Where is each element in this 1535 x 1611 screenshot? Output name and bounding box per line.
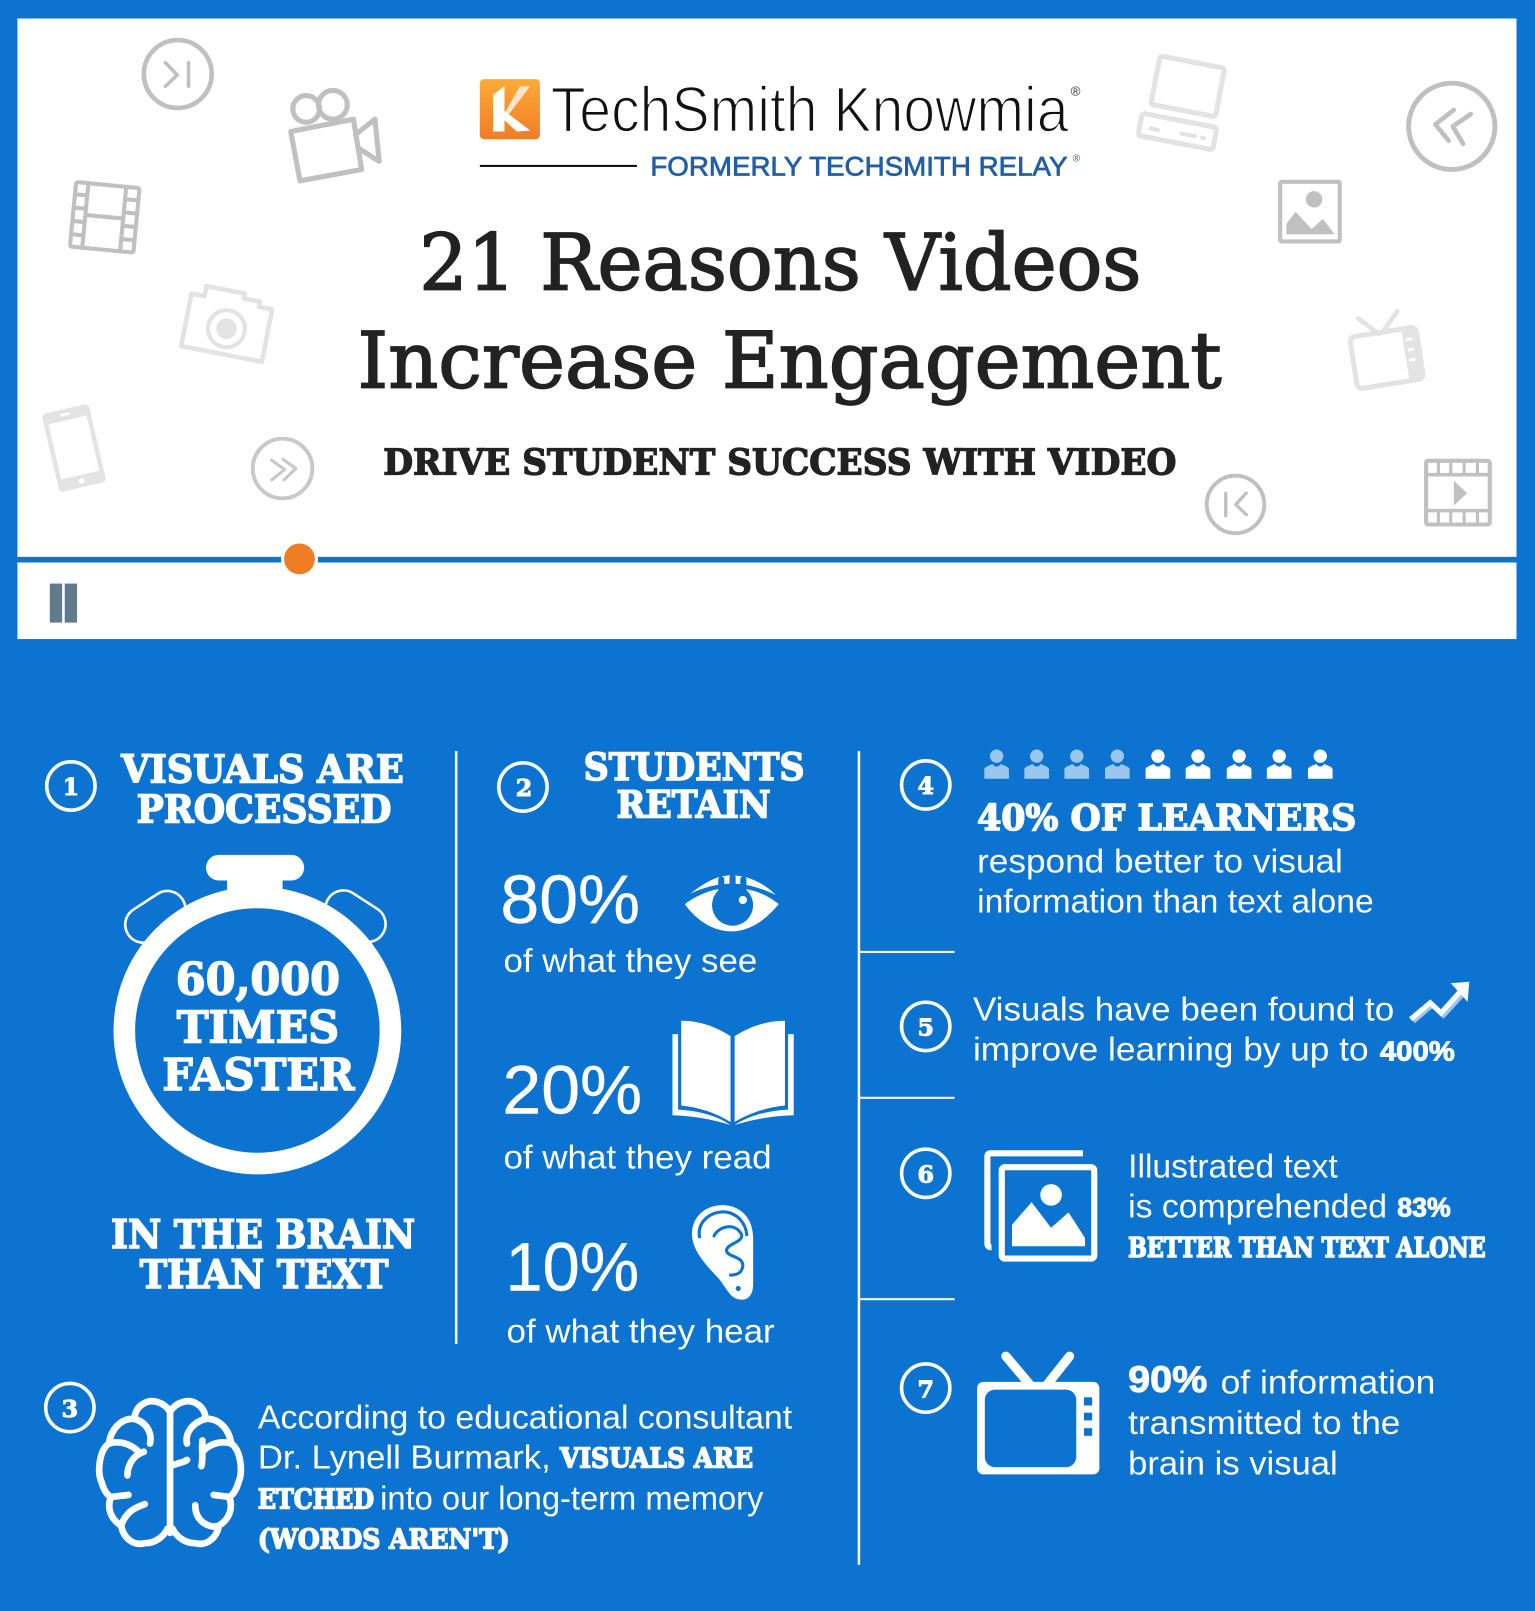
text: illustrated text comprehended: Illustrated text	[1128, 1147, 1338, 1184]
text: 40 percent of learners: respond better to visual	[977, 842, 1343, 879]
text: visuals improve learning: improve learning by up to	[973, 1030, 1369, 1067]
text: illustrated text comprehended: is comprehended	[1128, 1187, 1387, 1224]
icon row: nine learners	[984, 750, 1333, 779]
text: 90 percent visual: transmitted to the	[1128, 1404, 1400, 1441]
number badge 6: 6	[917, 1161, 934, 1189]
text: visuals improve learning: Visuals have been found to	[973, 991, 1394, 1028]
number badge 3: 3	[62, 1395, 78, 1423]
logo: TechSmith Knowmia	[480, 75, 1081, 182]
icon: television	[977, 1356, 1099, 1474]
number badge 4: 4	[917, 772, 934, 800]
text: 40 percent of learners: information than text alone	[977, 882, 1374, 919]
text: illustrated text comprehended	[1128, 1147, 1486, 1264]
heading: students retain: RETAIN	[616, 782, 771, 826]
icon: skip forward circle	[144, 40, 212, 108]
icon: video play strip	[1426, 461, 1490, 524]
heading: visuals are processed	[120, 746, 404, 831]
stat: 10 percent hear: of what they hear	[507, 1312, 775, 1349]
panel: reason 2 students retain	[499, 745, 804, 1349]
number badge 3	[46, 1383, 94, 1432]
icon: rewind circle	[1409, 83, 1495, 170]
text: Burmark quote: ETCHED	[258, 1484, 374, 1515]
icon: small TV	[1350, 311, 1424, 389]
icon: ear	[692, 1205, 753, 1300]
text: Burmark quote: According to educational consultant	[258, 1399, 792, 1436]
icon: smartphone	[42, 404, 106, 492]
number badge 5	[902, 1002, 950, 1051]
icon: stacked pictures	[987, 1153, 1094, 1259]
number badge 6	[902, 1149, 950, 1197]
text: in the brain than text: THAN TEXT	[140, 1252, 388, 1298]
icon: eye	[685, 875, 779, 931]
icon: pause button	[50, 584, 77, 623]
stopwatch text: 60,000 times faster: 60,000	[176, 955, 340, 1006]
text: in the brain than text	[111, 1212, 415, 1298]
text: visuals improve learning: 400%	[1380, 1035, 1455, 1066]
icon: film strip	[70, 182, 140, 253]
heading: visuals are processed: VISUALS ARE	[120, 746, 404, 791]
icon: fast forward circle	[253, 439, 312, 498]
text: 90 percent visual: of information	[1221, 1364, 1435, 1401]
panel: reason 7 TV	[902, 1356, 1435, 1481]
text: 90 percent visual: 90%	[1128, 1359, 1207, 1400]
number badge 1	[47, 762, 95, 810]
text: 40 percent of learners	[977, 797, 1374, 919]
icon: picture	[1280, 182, 1340, 241]
logo: TechSmith Knowmia: TechSmith Knowmia	[551, 75, 1069, 146]
logo: TechSmith Knowmia: ®	[1073, 153, 1081, 164]
icon: computer	[1138, 56, 1225, 150]
logo: TechSmith Knowmia: FORMERLY TECHSMITH RELAY	[650, 152, 1068, 182]
stat: 10 percent hear: 10%	[506, 1228, 639, 1305]
icon: K badge	[480, 79, 540, 139]
icon: brain	[99, 1401, 241, 1544]
stat: 20 percent read: of what they read	[503, 1139, 772, 1176]
title	[358, 219, 1222, 406]
panel: reason 3 brain	[46, 1383, 792, 1555]
icon: rising arrow	[1411, 982, 1469, 1021]
stat: 80 percent see: of what they see	[503, 942, 757, 979]
heading: students retain	[584, 745, 804, 826]
text: Burmark quote: into our long-term memory	[380, 1479, 764, 1516]
number badge 7: 7	[917, 1375, 934, 1403]
text: 40 percent of learners: 40% OF LEARNERS	[977, 797, 1356, 839]
stopwatch text: 60,000 times faster	[162, 955, 355, 1101]
heading: students retain: STUDENTS	[584, 745, 804, 789]
number badge 4	[902, 761, 950, 809]
stat: 80 percent see: 80%	[500, 861, 640, 938]
subtitle: DRIVE STUDENT SUCCESS WITH VIDEO	[383, 442, 1176, 484]
stat: 20 percent read: 20%	[502, 1052, 642, 1129]
number badge 5: 5	[917, 1014, 934, 1042]
progress bar	[17, 540, 1517, 577]
stat: 10 percent hear	[506, 1228, 775, 1349]
title: Increase Engagement	[358, 316, 1222, 406]
stopwatch text: 60,000 times faster: FASTER	[162, 1050, 355, 1101]
panel: header video player	[17, 18, 1517, 639]
number badge 2: 2	[516, 774, 532, 802]
text: Burmark quote: (WORDS AREN'T)	[258, 1524, 510, 1555]
number badge 1: 1	[63, 773, 79, 801]
icon: open book	[672, 1021, 794, 1125]
heading: visuals are processed: PROCESSED	[137, 786, 391, 831]
icon: film camera	[291, 90, 379, 181]
stat: 80 percent see	[500, 861, 757, 979]
title: 21 Reasons Videos	[419, 219, 1141, 309]
text: 90 percent visual	[1128, 1359, 1435, 1481]
number badge 2	[499, 763, 547, 811]
panel: reason 1 visuals are processed	[47, 746, 415, 1298]
panel: reason 4 learners	[902, 750, 1374, 919]
logo: TechSmith Knowmia: ®	[1071, 84, 1081, 99]
text: visuals improve learning	[973, 991, 1455, 1067]
icon: photo camera	[181, 284, 274, 362]
number badge 7	[902, 1364, 950, 1412]
text: illustrated text comprehended: 83%	[1397, 1192, 1451, 1222]
stopwatch text: 60,000 times faster: TIMES	[177, 1002, 339, 1053]
icon: skip back circle	[1207, 476, 1264, 533]
panel: reason 5 improve learning	[902, 982, 1469, 1067]
panel: reason 6 illustrated text	[902, 1147, 1486, 1264]
text: Burmark quote: VISUALS ARE	[559, 1444, 753, 1475]
text: in the brain than text: IN THE BRAIN	[111, 1212, 415, 1258]
text: Burmark quote: Dr. Lynell Burmark,	[258, 1439, 551, 1476]
text: 90 percent visual: brain is visual	[1128, 1444, 1338, 1481]
stat: 20 percent read	[502, 1052, 772, 1176]
icon: stopwatch	[118, 855, 392, 1164]
text: Burmark quote	[258, 1399, 792, 1555]
